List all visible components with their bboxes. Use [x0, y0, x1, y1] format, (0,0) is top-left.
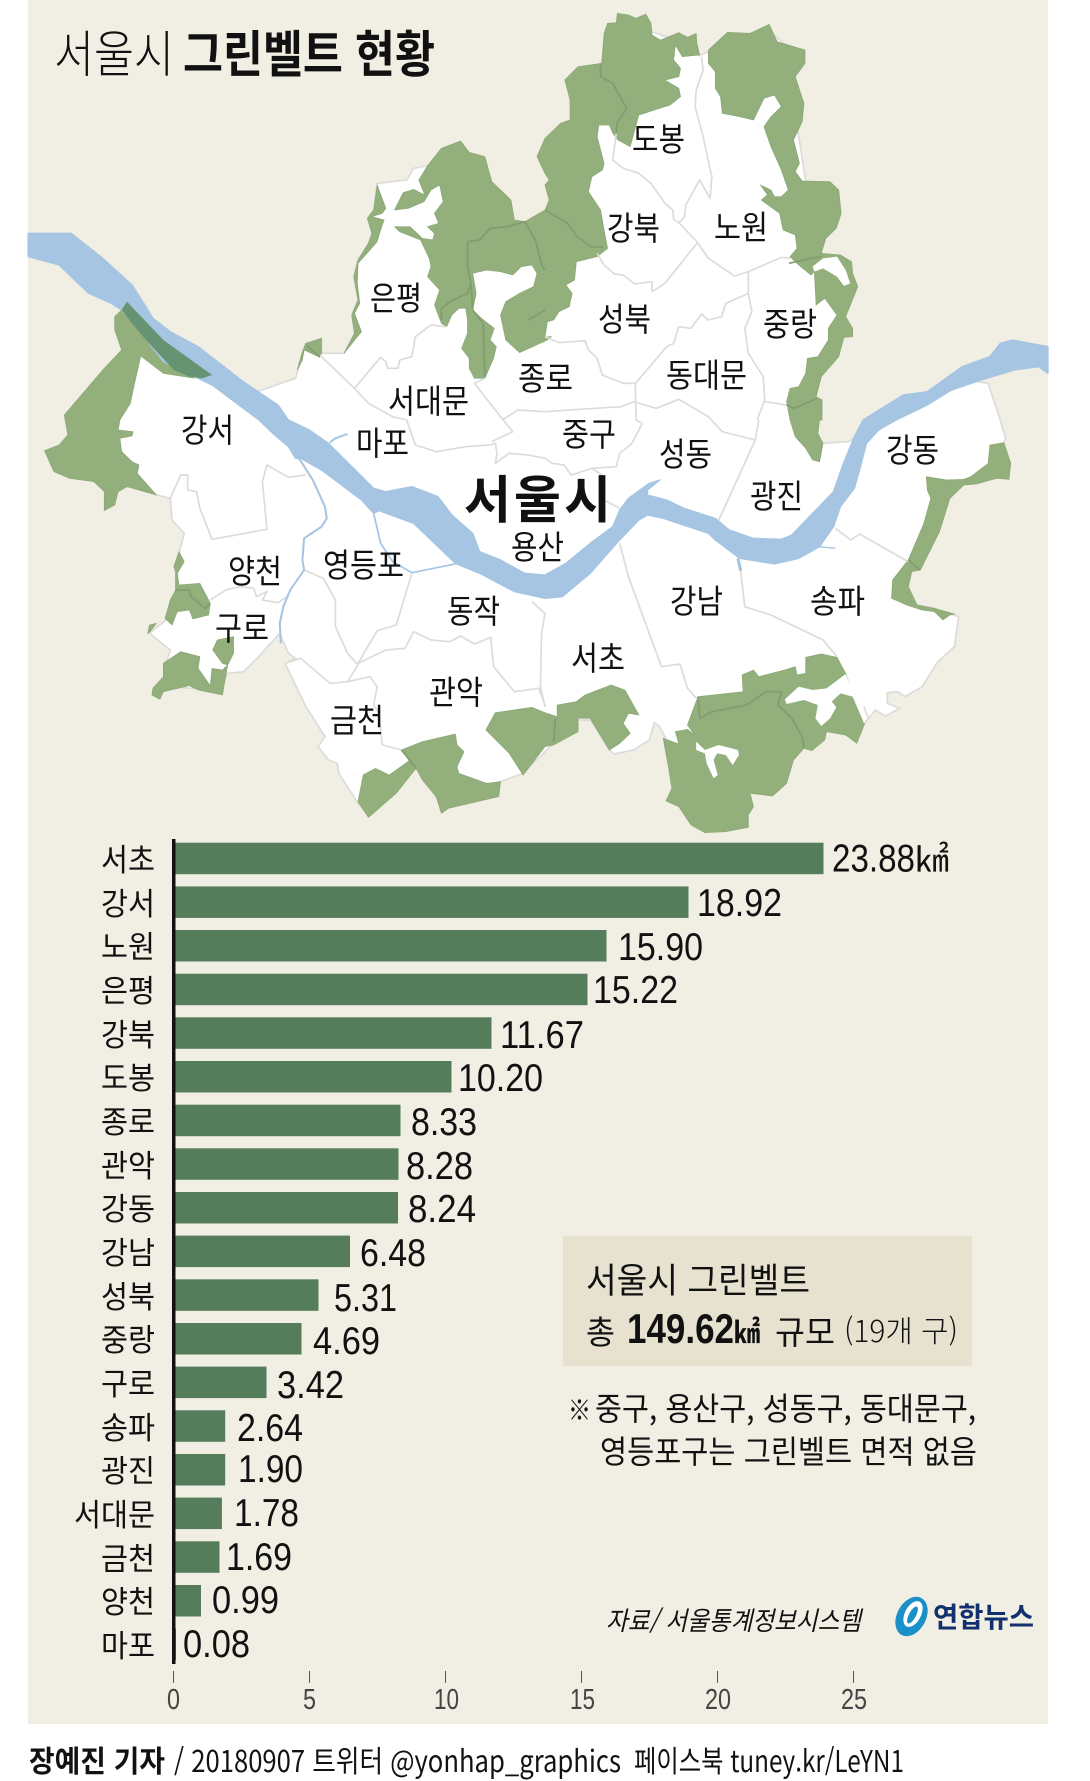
bar row: 강남: [101, 1228, 426, 1275]
bar row: 노원: 15.90: [618, 926, 703, 969]
bar row: 은평: 은평: [101, 966, 155, 1011]
x axis ticks and values: 15: [570, 1684, 595, 1716]
green: Gangseo: [44, 310, 195, 511]
bar row: 강동: 8.24: [408, 1188, 476, 1231]
bar row: 도봉: [101, 1053, 543, 1100]
bar row: 노원: 노원: [101, 922, 155, 967]
source: 자료/ 서울통계정보시스템: [606, 1601, 864, 1638]
label: 성동: 성동: [659, 436, 712, 473]
bar row: 도봉: 10.20: [458, 1057, 543, 1100]
label: 송파: 송파: [810, 583, 865, 620]
bar row: 강동: [101, 1184, 476, 1231]
map: Han river: [28, 233, 1048, 598]
footer credit: / 20180907 트위터 @yonhap_graphics: [174, 1737, 621, 1781]
callout: total area box: 149.62: [627, 1305, 734, 1352]
green: northern mountains: [395, 13, 700, 378]
map of Seoul: [28, 13, 1048, 833]
label: 종로: 종로: [518, 360, 573, 397]
label: 노원: 노원: [714, 209, 768, 246]
bar row: 구로: [101, 1359, 344, 1407]
bar row: 송파: [101, 1403, 303, 1450]
green: Guro south: [152, 652, 228, 699]
bar row: 중랑: 4.69: [313, 1320, 380, 1363]
bar row: 서대문: 서대문: [74, 1490, 155, 1535]
bar row: 양천: 양천: [101, 1577, 155, 1622]
green: Seocho and Gwanak middle: [486, 685, 639, 775]
green: Gangdong and Songpa edge: [892, 443, 1011, 620]
x axis ticks and values: 5: [303, 1684, 316, 1716]
map: white clearings inside green: [696, 257, 867, 778]
map: district labels: [181, 121, 939, 739]
green: Eunpyeong west strip: [344, 185, 386, 353]
bar row: 은평: 15.22: [593, 969, 678, 1012]
bar row: 중랑: [101, 1315, 380, 1363]
bar row: 금천: 금천: [101, 1534, 155, 1579]
title: 서울시: [54, 15, 174, 87]
bar row: 도봉: 도봉: [101, 1053, 155, 1098]
bar row: 서대문: [74, 1490, 299, 1535]
label: 양천: 양천: [228, 553, 282, 590]
bar row: 종로: [101, 1097, 477, 1144]
label: 은평: 은평: [370, 280, 422, 317]
bar row: 강서: 강서: [101, 879, 155, 924]
label: 관악: 관악: [429, 674, 483, 711]
bar row: 광진: [101, 1446, 303, 1491]
bar row: 노원: [101, 922, 703, 969]
bar row: 양천: 0.99: [212, 1579, 279, 1622]
bar row: 송파: 2.64: [237, 1407, 303, 1450]
bar row: 관악: 8.28: [406, 1145, 473, 1188]
callout: total area box: (19개 구): [844, 1307, 958, 1351]
label: 강북: 강북: [607, 210, 660, 247]
bar row: 금천: [101, 1534, 292, 1579]
map: Han river tributaries: [280, 434, 835, 643]
map: green belt over river: [122, 302, 212, 378]
title: 그린벨트 현황: [183, 15, 435, 87]
x axis ticks and values: 20: [705, 1684, 731, 1716]
bar row: 마포: 0.08: [183, 1623, 250, 1666]
green: Nowon and Jungnang: [708, 24, 858, 462]
x axis ticks and values: [167, 1671, 867, 1716]
map: city silhouette: [111, 30, 1006, 817]
bar row: 강남: 6.48: [360, 1232, 426, 1275]
label: 동작: 동작: [447, 593, 500, 630]
footer credit: 페이스북 tuney.kr/LeYN1: [634, 1737, 904, 1781]
title: [54, 15, 435, 87]
bar row: 마포: 마포: [101, 1621, 155, 1666]
map: district boundaries: [170, 57, 908, 750]
x axis ticks and values: 25: [841, 1684, 867, 1716]
green: Guro east: [213, 637, 234, 665]
bar row: 광진: 1.90: [238, 1448, 303, 1491]
bar row: 강북: 11.67: [500, 1014, 584, 1057]
logo: Yonhap News: 연합뉴스: [933, 1596, 1034, 1636]
label: 마포: 마포: [356, 425, 409, 462]
label: 영등포: 영등포: [323, 547, 404, 584]
map: green belt areas: [44, 13, 1011, 833]
label: 중랑: 중랑: [763, 306, 817, 343]
green: Guro fragment: [148, 623, 156, 633]
label: 강동: 강동: [886, 432, 939, 469]
bar row: 성북: 5.31: [334, 1277, 397, 1320]
bar row: 서초: [101, 832, 949, 882]
green: Yangcheon and Guro west: [165, 552, 210, 625]
bar row: 종로: 종로: [101, 1097, 155, 1142]
label: 강남: 강남: [670, 583, 723, 620]
bar row: 금천: 1.69: [226, 1536, 292, 1579]
bar row: 강남: 강남: [101, 1228, 155, 1273]
bar row: 강서: 18.92: [697, 882, 782, 925]
label: 금천: 금천: [330, 702, 384, 739]
bar row: 서대문: 1.78: [234, 1492, 299, 1535]
axis line: [172, 839, 176, 1664]
bar row: 서초: ㎢: [915, 832, 949, 882]
footer credit: 장예진 기자: [29, 1737, 165, 1781]
bar row: 관악: 관악: [101, 1141, 155, 1186]
callout: total area box: [563, 1236, 972, 1366]
bar row: 구로: 구로: [101, 1359, 155, 1404]
note: [568, 1384, 977, 1473]
bar row: 강서: [101, 879, 782, 925]
label: 도봉: 도봉: [632, 121, 685, 158]
label: 성북: 성북: [598, 301, 651, 338]
x axis ticks and values: 10: [434, 1684, 459, 1716]
label: 중구: 중구: [562, 416, 616, 453]
map: city name label: 서울시: [464, 459, 611, 533]
bar row: 성북: [101, 1272, 397, 1320]
bar row: 강북: 강북: [101, 1010, 155, 1055]
x axis ticks and values: 0: [167, 1684, 180, 1716]
icon: Yonhap swirl: [889, 1591, 934, 1642]
green: Gwanak and Geumcheon: [358, 734, 501, 817]
green: Mapo fragment: [297, 338, 322, 370]
bar row: 서초: 23.88: [832, 838, 915, 880]
bar row: 종로: 8.33: [411, 1101, 477, 1144]
note: 중구, 용산구, 성동구, 동대문구,: [595, 1384, 976, 1430]
bar row: 성북: 성북: [101, 1272, 155, 1317]
bar row: 중랑: 중랑: [101, 1315, 155, 1360]
bar row: 구로: 3.42: [277, 1364, 344, 1407]
label: 광진: 광진: [750, 478, 803, 515]
callout: total area box: 규모: [775, 1306, 835, 1354]
bar row: 양천: [101, 1577, 279, 1622]
callout: total area box: ㎢: [734, 1308, 760, 1352]
map: boundaries inside green: [176, 63, 920, 768]
logo: Yonhap News: [889, 1591, 1034, 1642]
callout: total area box: 총: [586, 1306, 615, 1354]
label: 구로: 구로: [215, 610, 269, 647]
bar row: 광진: 광진: [101, 1446, 155, 1491]
label: 용산: 용산: [511, 529, 564, 566]
footer credit: [29, 1737, 904, 1781]
label: 서대문: 서대문: [388, 383, 469, 420]
bar row: 강동: 강동: [101, 1184, 155, 1229]
bar row: 관악: [101, 1141, 473, 1188]
green: Gangnam and Seocho south: [663, 654, 865, 833]
bar chart: [74, 832, 949, 1716]
bar row: 마포: [101, 1621, 250, 1666]
bar row: 송파: 송파: [101, 1403, 155, 1448]
label: 동대문: 동대문: [666, 357, 747, 394]
bar row: 은평: [101, 966, 678, 1012]
bar row: 강북: [101, 1010, 584, 1057]
note: 영등포구는 그린벨트 면적 없음: [600, 1427, 977, 1473]
callout: total area box: 서울시 그린벨트: [586, 1253, 810, 1304]
label: 강서: 강서: [181, 412, 234, 449]
note: ※: [568, 1389, 591, 1429]
bar row: 서초: 서초: [101, 835, 155, 880]
label: 서초: 서초: [571, 640, 625, 677]
